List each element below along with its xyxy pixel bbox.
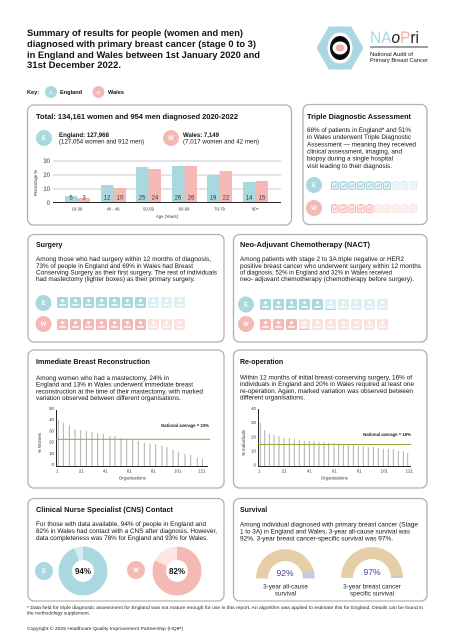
text: triple diagnostic: visit leading to their diagnosis. xyxy=(307,163,392,170)
icons: Wales clipboards: W xyxy=(311,206,317,212)
text: triple diagnostic: clinical assessment, imaging, and xyxy=(307,148,403,156)
logo: NAoPri: NAoPri xyxy=(370,28,419,47)
chart: re-operation by organisation: 30 xyxy=(251,420,257,425)
text: survival: 92%. 3-year breast cancer-specific survival was 97%. xyxy=(240,536,393,542)
text: survival: Among individual diagnosed with primary breast cancer (Stage xyxy=(240,522,419,528)
bar chart: age distribution: 30 xyxy=(43,159,51,165)
text: reconstruction: variation observed between different organisations. xyxy=(36,395,181,402)
heading: CNS: Clinical Nurse Specialist (CNS) Contact xyxy=(36,505,173,514)
text: surgery: Conserving Surgery as their first surgery. The rest of individuals xyxy=(36,270,217,276)
chart: reconstruction by organisation: 10 xyxy=(49,451,55,456)
heading: triple diagnostic: Triple Diagnostic Assessment xyxy=(307,112,412,121)
text: surgery xyxy=(36,256,217,283)
chart: re-operation by organisation: National average = 16% xyxy=(363,432,411,437)
chart: reconstruction by organisation: 1 xyxy=(56,468,59,474)
gauge: 97% breast cancer specific survival: specific survival xyxy=(350,590,394,598)
chart: reconstruction by organisation: 61 xyxy=(127,468,132,474)
title xyxy=(27,28,260,70)
chart: reconstruction by organisation: Organisations xyxy=(119,476,147,480)
chart: reconstruction by organisation: 81 xyxy=(151,468,156,474)
bar chart: age distribution: 20 xyxy=(43,173,51,179)
chart: re-operation by organisation: 0 xyxy=(254,462,257,468)
footnote: * Data field for triple diagnostic assessment for England was not mature enough for use in this report. An algorithm was applied to estimate this for England. Details can be found in xyxy=(27,605,423,611)
gauge: 92% all-cause survival xyxy=(256,549,315,598)
chart: reconstruction by organisation: 50 xyxy=(49,406,55,411)
logo: NAoPri xyxy=(317,27,428,69)
icons: England NACT boxes xyxy=(238,296,388,312)
chart: re-operation by organisation: 21 xyxy=(282,468,287,474)
title: in England and Wales between 1st January 2020 and xyxy=(27,50,260,60)
chart: re-operation by organisation: Organisations xyxy=(321,476,349,480)
Wales total: W xyxy=(168,136,174,142)
chart: reconstruction by organisation: 121 xyxy=(198,468,206,474)
donut: England 94%: 94% xyxy=(75,567,91,576)
text: re-operation: Within 12 months of initial breast-conserving surgery, 16% of xyxy=(240,374,412,382)
icons: England NACT boxes: E xyxy=(244,302,248,308)
gauge: 97% breast cancer specific survival: 97% xyxy=(363,567,381,577)
chart: re-operation by organisation: 81 xyxy=(357,468,362,474)
text: reconstruction: reconstruction at the time of their mastectomy, with marked xyxy=(36,388,204,395)
icons: England surgery boxes: E xyxy=(41,301,46,307)
icons: England surgery boxes xyxy=(36,295,185,311)
bar chart: age distribution: 10 xyxy=(43,187,51,193)
chart: re-operation by organisation: 10 xyxy=(251,448,257,453)
panel: triple diagnostic assessment xyxy=(303,104,427,224)
text: survival xyxy=(240,522,419,542)
title: diagnosed with primary breast cancer (stage 0 to 3) xyxy=(27,39,256,49)
chart: re-operation by organisation: 40 xyxy=(251,406,257,411)
text: re-operation: different organisations. xyxy=(240,394,305,402)
text: triple diagnostic: Assessment — meaning they received xyxy=(307,141,417,148)
chart: re-operation by organisation: 1 xyxy=(258,468,261,474)
bar chart: age distribution: 40 - 49 xyxy=(106,206,120,212)
heading: total: Total: 134,161 women and 954 men diagnosed 2020-2022 xyxy=(36,112,238,121)
text: reconstruction: Among women who had a mastectomy, 24% in xyxy=(36,375,170,382)
logo: NAoPri: Primary Breast Cancer xyxy=(370,58,428,64)
panel: clinical nurse specialist contact xyxy=(28,498,224,601)
text: CNS: For those with data available, 94% of people in England and xyxy=(36,521,207,528)
copyright: Copyright © 2025 Healthcare Quality Improvement Partnership (HQIP) xyxy=(27,625,183,632)
key: W xyxy=(97,90,101,95)
bar chart: age distribution: Percentage % xyxy=(33,170,38,196)
footnote: the methodology supplement. xyxy=(27,610,90,616)
text: surgery: had mastectomy (lighter boxes) as their primary surgery. xyxy=(36,276,195,283)
donut: Wales 82%: W xyxy=(133,568,139,574)
chart: re-operation by organisation: 121 xyxy=(406,468,414,474)
key: Key: xyxy=(27,90,39,96)
bar chart: age distribution: 18-39 xyxy=(72,206,83,212)
text: triple diagnostic: in Wales underwent Triple Diagnostic xyxy=(307,134,411,141)
text: surgery: 73% of people in England and 69% in Wales had Breast xyxy=(36,263,193,270)
title: Summary of results for people (women and men) xyxy=(27,28,243,38)
text: re-operation: re-operation. Again, marked variation was observed between xyxy=(240,388,414,395)
bar chart: age distribution: 3 xyxy=(82,196,86,202)
text: NACT xyxy=(240,256,421,283)
chart: reconstruction by organisation: 30 xyxy=(49,428,55,433)
key: Wales xyxy=(108,90,124,96)
key: E xyxy=(50,90,53,95)
gauge: 92% all-cause survival: survival xyxy=(275,590,296,598)
text: survival: 1 to 3A) in England and Wales, 3-year all-cause survival was xyxy=(240,528,410,536)
key: England xyxy=(60,90,83,96)
text: re-operation: individuals in England and 20% in Wales required at least one xyxy=(240,381,415,388)
England total: (127,054 women and 912 men) xyxy=(59,138,144,146)
text: triple diagnostic xyxy=(307,127,417,170)
heading: survival: Survival xyxy=(240,507,267,514)
heading: re-operation: Re-operation xyxy=(240,359,283,366)
bar chart: age distribution: 22 xyxy=(223,196,230,202)
key xyxy=(27,86,124,98)
heading: surgery: Surgery xyxy=(36,242,63,249)
text: surgery: Among those who had surgery within 12 months of diagnosis, xyxy=(36,256,211,263)
text: triple diagnostic: 68% of patients in England* and 51% xyxy=(307,127,412,134)
donut: Wales 82%: 82% xyxy=(169,567,185,576)
bar chart: age distribution: Age (Years) xyxy=(156,214,179,219)
bar chart: age distribution: 50-59 xyxy=(143,206,155,212)
icons: Wales surgery boxes: W xyxy=(41,322,47,328)
chart: reconstruction by organisation: National average = 23% xyxy=(161,423,209,428)
footnote xyxy=(27,605,423,616)
donut: Wales 82% xyxy=(127,553,195,589)
chart: re-operation by organisation: 20 xyxy=(251,434,257,439)
text: CNS xyxy=(36,521,217,542)
chart: re-operation by organisation: % Individuals xyxy=(241,429,246,456)
chart: reconstruction by organisation xyxy=(37,406,210,480)
bar chart: age distribution: 0 xyxy=(47,201,51,207)
gauge: 97% breast cancer specific survival xyxy=(341,547,403,598)
text: NACT: Among patients with stage 2 to 3A triple negative or HER2 xyxy=(240,256,405,263)
England total xyxy=(36,130,144,146)
text: re-operation xyxy=(240,374,415,402)
panel: surgery xyxy=(28,234,224,342)
England total: E xyxy=(42,136,46,142)
panel: total diagnosed xyxy=(28,105,292,225)
text: NACT: positive breast cancer who underwent surgery within 12 months xyxy=(240,263,421,270)
gauge: 97% breast cancer specific survival: 3-year breast cancer xyxy=(343,584,401,590)
text: NACT: of diagnosis, 52% in England and 32% in Wales received xyxy=(240,270,393,276)
icons: Wales NACT boxes: W xyxy=(243,322,249,328)
bar chart: age distribution: 19 xyxy=(210,196,217,202)
heading: NACT: Neo-Adjuvant Chemotherapy (NACT) xyxy=(240,242,370,249)
icons: Wales NACT boxes xyxy=(238,316,388,332)
chart: reconstruction by organisation: % Women xyxy=(37,432,42,453)
bar chart: age distribution: 70-79 xyxy=(214,206,226,212)
bar chart: age distribution: 24 xyxy=(152,196,159,202)
gauge: 92% all-cause survival: 3-year all-cause xyxy=(263,584,308,590)
text: NACT: neo- adjuvant chemotherapy (chemotherapy before surgery). xyxy=(240,276,414,283)
panel: re-operation xyxy=(234,350,427,488)
text: reconstruction: England and 13% in Wales underwent immediate breast xyxy=(36,382,193,389)
text: CNS: 82% in Wales had contact with a CNS after diagnosis. However, xyxy=(36,528,217,535)
text: triple diagnostic: biopsy during a single hospital xyxy=(307,156,393,163)
chart: re-operation by organisation xyxy=(241,406,414,480)
panel: survival xyxy=(234,498,427,601)
bar chart: age distribution: 26 xyxy=(188,196,195,202)
icons: England clipboards: E xyxy=(312,183,316,189)
bar chart: age distribution: 60-69 xyxy=(179,206,190,212)
bar chart: age distribution: 5 xyxy=(69,196,73,202)
bar chart: age distribution: 12 xyxy=(104,196,111,202)
panel: neo-adjuvant chemotherapy xyxy=(234,234,427,342)
chart: re-operation by organisation: 101 xyxy=(381,468,389,474)
chart: reconstruction by organisation: 21 xyxy=(79,468,84,474)
bar chart: age distribution xyxy=(33,159,281,219)
heading: reconstruction: Immediate Breast Reconstruction xyxy=(36,359,150,366)
chart: reconstruction by organisation: 41 xyxy=(103,468,108,474)
text: reconstruction xyxy=(36,375,204,402)
logo: NAoPri: National Audit of xyxy=(370,52,414,58)
chart: re-operation by organisation: 41 xyxy=(307,468,312,474)
title: 31st December 2022. xyxy=(27,60,121,70)
text: CNS: data completeness was 78% for England and 93% for Wales. xyxy=(36,535,208,542)
donut: England 94%: E xyxy=(42,569,46,575)
chart: reconstruction by organisation: 20 xyxy=(49,440,55,445)
bar chart: age distribution: 25 xyxy=(139,196,146,202)
chart: reconstruction by organisation: 0 xyxy=(52,462,55,467)
Wales total xyxy=(163,130,259,146)
chart: reconstruction by organisation: 101 xyxy=(174,468,182,474)
gauge: 92% all-cause survival: 92% xyxy=(276,568,294,578)
bar chart: age distribution: 14 xyxy=(246,196,253,202)
Wales total: (7,017 women and 42 men) xyxy=(183,138,259,146)
bar chart: age distribution: 26 xyxy=(175,196,182,202)
bar chart: age distribution: 80+ xyxy=(252,206,260,212)
icons: Wales surgery boxes xyxy=(36,316,185,332)
bar chart: age distribution: 15 xyxy=(259,196,266,202)
panel: immediate breast reconstruction xyxy=(28,350,224,488)
chart: reconstruction by organisation: 40 xyxy=(49,417,55,422)
Wales total: Wales: 7,149 xyxy=(183,132,220,139)
England total: England: 127,968 xyxy=(59,132,110,139)
donut: England 94% xyxy=(35,553,101,589)
chart: re-operation by organisation: 61 xyxy=(332,468,337,474)
bar chart: age distribution: 10 xyxy=(117,196,124,202)
